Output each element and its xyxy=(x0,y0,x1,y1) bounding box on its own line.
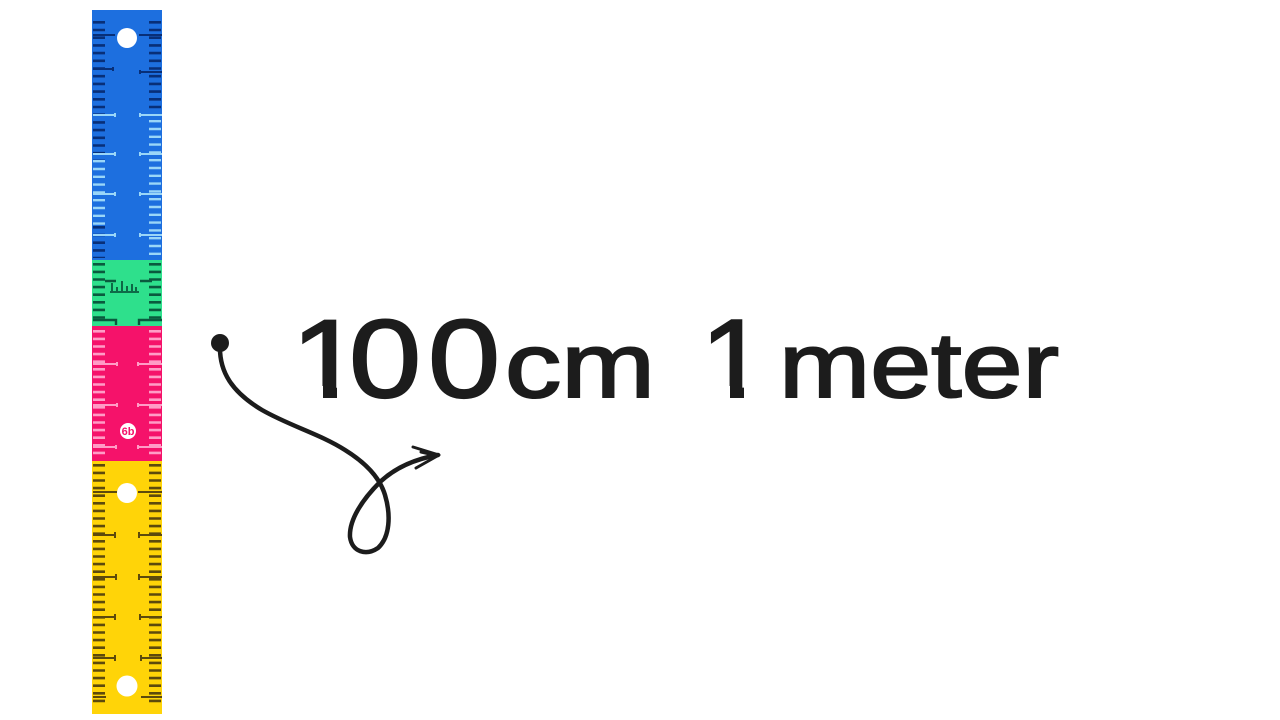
headline: 100cm 1 meter xyxy=(302,318,1058,400)
pink segment number badge xyxy=(120,423,136,439)
ruler xyxy=(92,10,162,714)
pink segment number badge: 6b xyxy=(122,426,135,438)
blue segment ticks xyxy=(99,21,155,258)
ruler pink segment xyxy=(92,326,162,461)
ruler hole middle xyxy=(117,483,137,503)
number 100: 100 xyxy=(291,297,500,421)
ruler blue segment xyxy=(92,10,162,260)
unit cm: cm xyxy=(505,315,655,417)
green segment centre marks xyxy=(110,281,139,292)
pink segment ticks xyxy=(93,330,162,458)
yellow segment ticks xyxy=(93,464,162,704)
blue segment long ticks xyxy=(93,35,162,237)
ruler hole top xyxy=(117,28,137,48)
infographic canvas xyxy=(92,10,1058,714)
number 1: 1 xyxy=(700,297,767,421)
arrow start dot xyxy=(211,334,229,352)
ruler hole bottom xyxy=(116,676,138,696)
curly arrow xyxy=(211,334,439,552)
green segment ticks xyxy=(93,263,162,325)
word meter: meter xyxy=(779,315,1059,417)
arrow curve xyxy=(220,345,438,552)
arrow head xyxy=(413,447,439,468)
ruler green segment xyxy=(92,260,162,326)
ruler yellow segment xyxy=(92,461,162,714)
